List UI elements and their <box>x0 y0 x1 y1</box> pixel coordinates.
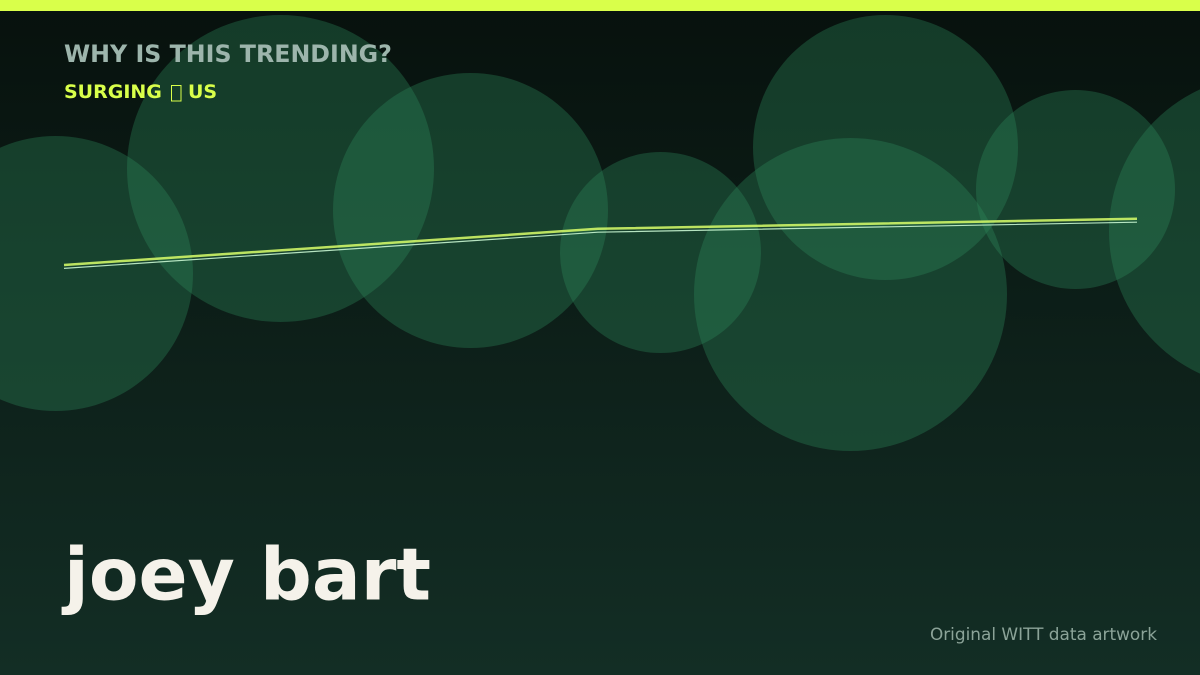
bubble 2 <box>127 15 434 322</box>
trend line: thick accent <box>64 219 1137 265</box>
missing-glyph box <box>172 86 181 101</box>
kicker heading: WHY IS THIS TRENDING? <box>64 40 392 68</box>
status label <box>64 81 217 103</box>
bubble 8 <box>1109 75 1200 388</box>
trend line <box>64 219 1137 268</box>
bubble 4 <box>560 152 761 353</box>
main title: joey bart <box>61 534 431 618</box>
trend line: thin highlight <box>64 222 1137 268</box>
bubble 7 <box>976 90 1175 289</box>
top accent bar <box>0 0 1200 11</box>
region code: US <box>188 81 217 103</box>
bubble 5 <box>694 138 1007 451</box>
bubble cluster <box>0 15 1200 451</box>
bubble 1 <box>0 136 193 411</box>
bubble 3 <box>333 73 608 348</box>
bubble 6 <box>753 15 1018 280</box>
status word: SURGING <box>64 81 162 103</box>
footer credit: Original WITT data artwork <box>930 624 1157 644</box>
